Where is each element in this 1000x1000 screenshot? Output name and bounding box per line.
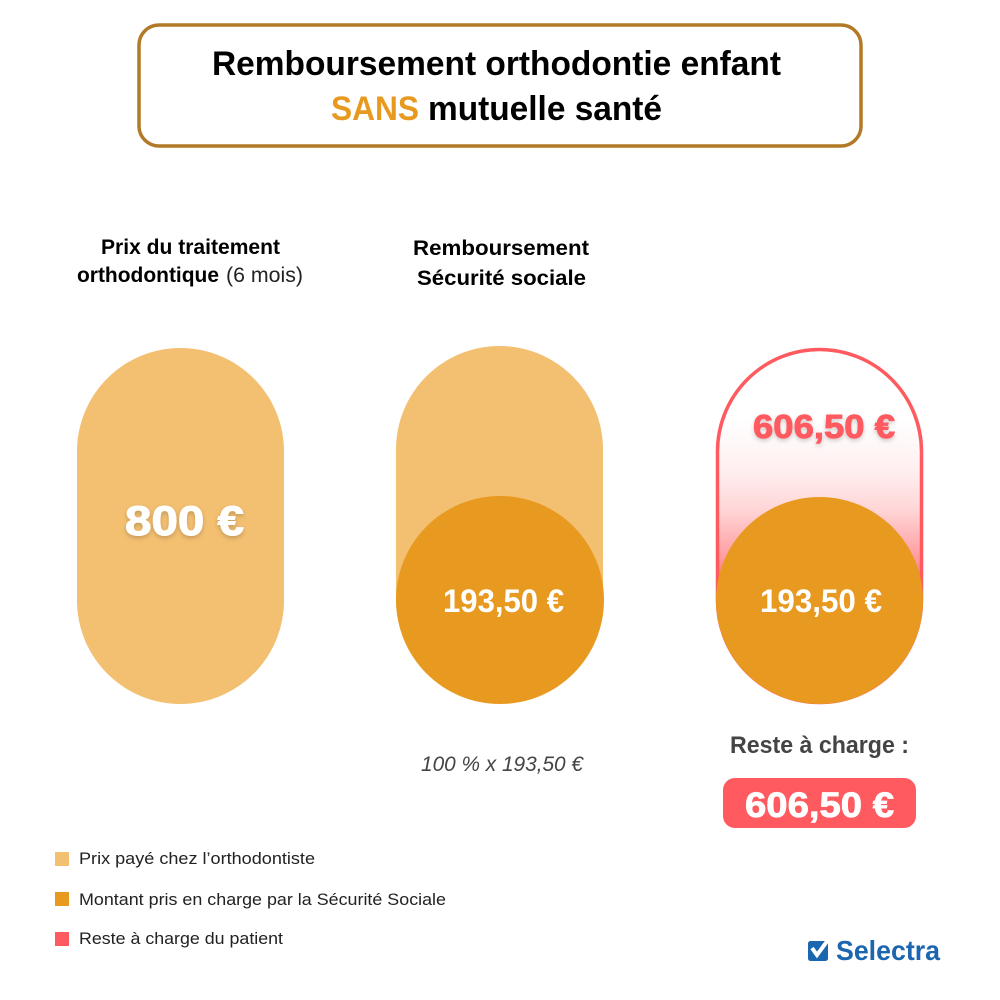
circle: montant remboursé bbox=[716, 497, 923, 704]
heading: remboursement Sécurité sociale bbox=[413, 237, 589, 290]
heading: remboursement Sécurité sociale: Remboursement bbox=[413, 237, 589, 260]
legend item: montant pris en charge: Montant pris en charge par la Sécurité Sociale bbox=[79, 890, 446, 909]
label: reste à charge: Reste à charge : bbox=[730, 732, 909, 759]
circle: montant remboursé bbox=[396, 496, 604, 704]
badge: 606,50 € bbox=[723, 778, 916, 828]
heading: prix du traitement: Prix du traitement bbox=[101, 236, 280, 259]
title box bbox=[139, 25, 861, 146]
title line 2: mutuelle santé bbox=[428, 90, 662, 128]
logo: Selectra: Selectra bbox=[836, 935, 940, 966]
icon: check box bbox=[808, 940, 828, 961]
heading: remboursement Sécurité sociale: Sécurité sociale bbox=[417, 267, 586, 290]
pill: prix du traitement bbox=[77, 348, 284, 704]
value: 606,50 €: 606,50 € bbox=[753, 408, 895, 445]
value: 800 €: 800 € bbox=[125, 497, 244, 544]
heading: prix du traitement: orthodontique bbox=[77, 264, 219, 287]
heading: prix du traitement bbox=[77, 236, 303, 287]
legend item: reste à charge: Reste à charge du patient bbox=[79, 929, 283, 948]
title line 2: SANS bbox=[331, 90, 419, 128]
value: 193,50 €: 193,50 € bbox=[443, 583, 564, 619]
legend item: prix payé: Prix payé chez l’orthodontiste bbox=[79, 849, 315, 868]
formula: 100 % x 193,50 € bbox=[421, 753, 584, 776]
badge: 606,50 €: 606,50 € bbox=[745, 786, 894, 825]
pill: remboursement Sécurité sociale bbox=[396, 346, 604, 704]
heading: prix du traitement: (6 mois) bbox=[226, 264, 303, 287]
pill: reste à charge bbox=[716, 350, 923, 704]
value: 193,50 €: 193,50 € bbox=[760, 583, 882, 619]
title line 1: Remboursement orthodontie enfant bbox=[212, 45, 781, 83]
legend bbox=[55, 849, 446, 948]
title line 2 bbox=[331, 90, 662, 128]
